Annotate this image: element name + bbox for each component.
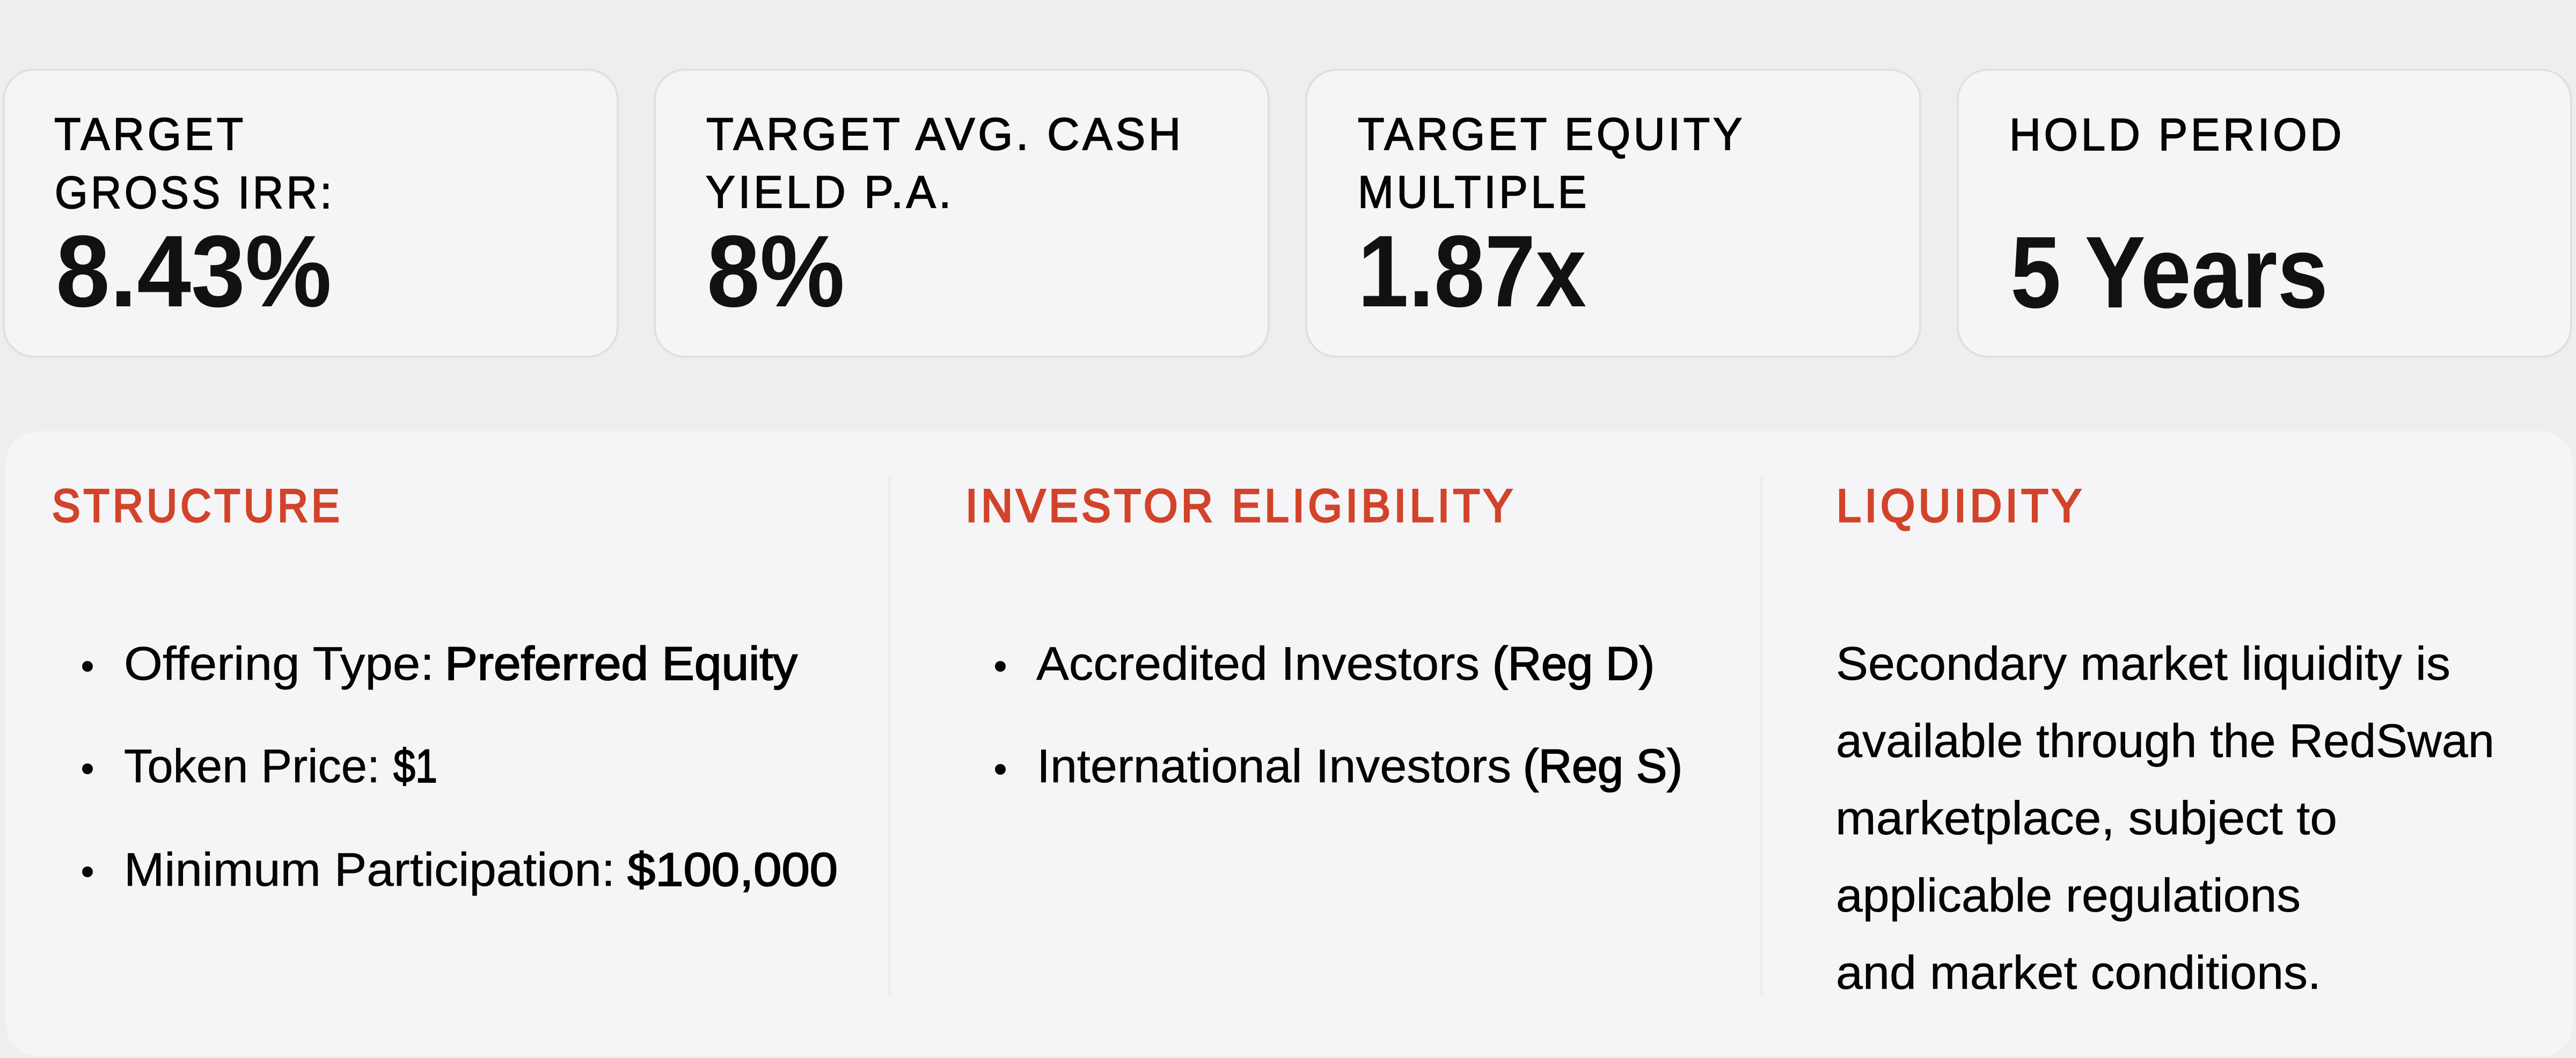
heading: liquidity: LIQUIDITY — [1836, 480, 2085, 532]
list item: international investors: International Investors — [1037, 739, 1511, 792]
label: target equity multiple: MULTIPLE — [1358, 167, 1590, 218]
text block: liquidity description: marketplace, subject to — [1835, 791, 2337, 844]
card: hold period — [1958, 70, 2571, 357]
label: target gross IRR — [54, 109, 335, 218]
list item: accredited investors — [995, 637, 1655, 690]
text block: liquidity description: applicable regulations — [1836, 869, 2301, 922]
heading: investor eligibility: INVESTOR ELIGIBILITY — [965, 480, 1516, 532]
value: 8.43%: 8.43% — [56, 215, 332, 328]
card: target gross IRR — [4, 70, 618, 357]
label: target average cash yield: YIELD P.A. — [706, 167, 954, 218]
panel: offering details — [6, 431, 2573, 1056]
value: 8%: 8% — [707, 215, 845, 328]
label: hold period: HOLD PERIOD — [2009, 109, 2345, 160]
list item: accredited investors: (Reg D) — [1492, 637, 1655, 690]
section: structure — [52, 480, 838, 896]
section: investor eligibility — [965, 480, 1682, 792]
value: 1.87x: 1.87x — [1358, 215, 1586, 328]
card: target equity multiple — [1306, 70, 1920, 357]
value: 5 years: 5 Years — [2010, 216, 2328, 329]
list item: token price: $1 — [393, 739, 437, 792]
list item: offering type: Preferred Equity — [445, 637, 797, 690]
list item: accredited investors: Accredited Investors — [1036, 637, 1480, 690]
list item: token price: Token Price: — [124, 739, 380, 792]
list item: international investors: (Reg S) — [1523, 739, 1682, 792]
label: target average cash yield: TARGET AVG. CASH — [706, 109, 1184, 160]
label: target equity multiple: TARGET EQUITY — [1358, 109, 1745, 160]
list item: offering type: Offering Type: — [124, 637, 434, 690]
section: liquidity — [1835, 480, 2494, 999]
label: target average cash yield — [706, 109, 1184, 218]
text block: liquidity description: available through the RedSwan — [1836, 714, 2494, 767]
list item: minimum participation: Minimum Participation: — [124, 843, 615, 896]
list item: international investors — [995, 739, 1682, 792]
label: target gross IRR: TARGET — [54, 109, 246, 160]
card: target average cash yield — [655, 70, 1269, 357]
text block: liquidity description: Secondary market liquidity is — [1836, 637, 2450, 690]
label: target gross IRR: GROSS IRR: — [55, 167, 335, 218]
text block: liquidity description — [1835, 637, 2494, 999]
list item: minimum participation — [82, 843, 838, 896]
label: target equity multiple — [1358, 109, 1745, 218]
list item: offering type — [82, 637, 797, 690]
list item: minimum participation: $100,000 — [627, 843, 838, 896]
text block: liquidity description: and market conditions. — [1836, 946, 2321, 999]
heading: structure: STRUCTURE — [52, 480, 343, 532]
